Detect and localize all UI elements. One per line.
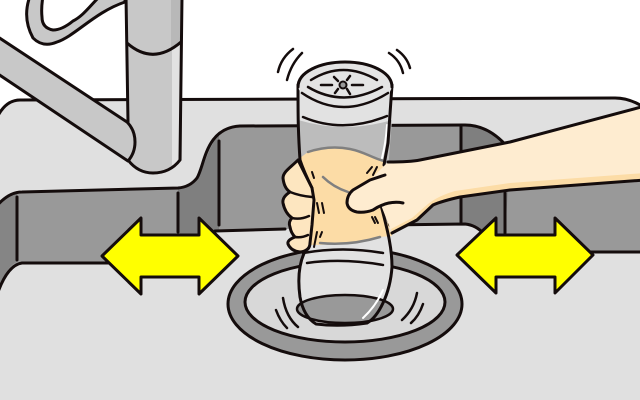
arm and thumb bbox=[347, 106, 640, 233]
bottle hole view bbox=[297, 295, 393, 323]
grip crease marks bbox=[312, 167, 378, 247]
bottle cap bbox=[298, 62, 392, 107]
arrow: left double-headed bbox=[102, 218, 238, 294]
icon: drain bbox=[228, 248, 462, 360]
arrow: right double-headed bbox=[457, 218, 593, 293]
bottle liquid bbox=[300, 148, 392, 245]
icon: faucet bbox=[0, 0, 182, 173]
lines seen through bottle bbox=[303, 250, 383, 265]
icon: bottle bbox=[278, 49, 410, 325]
bottle body bbox=[298, 85, 392, 324]
bottle outline bbox=[298, 85, 392, 325]
faucet column bbox=[126, 0, 182, 173]
motion lines: drain bbox=[276, 293, 423, 328]
panel: sink counter bbox=[0, 98, 640, 400]
motion lines: bottle shake bbox=[278, 49, 410, 80]
faucet lever bbox=[0, 35, 135, 161]
panel: sink basin bbox=[0, 125, 640, 296]
fingers bbox=[283, 160, 314, 252]
faucet hose loop bbox=[27, 0, 125, 44]
icon: hand and arm bbox=[283, 106, 640, 252]
